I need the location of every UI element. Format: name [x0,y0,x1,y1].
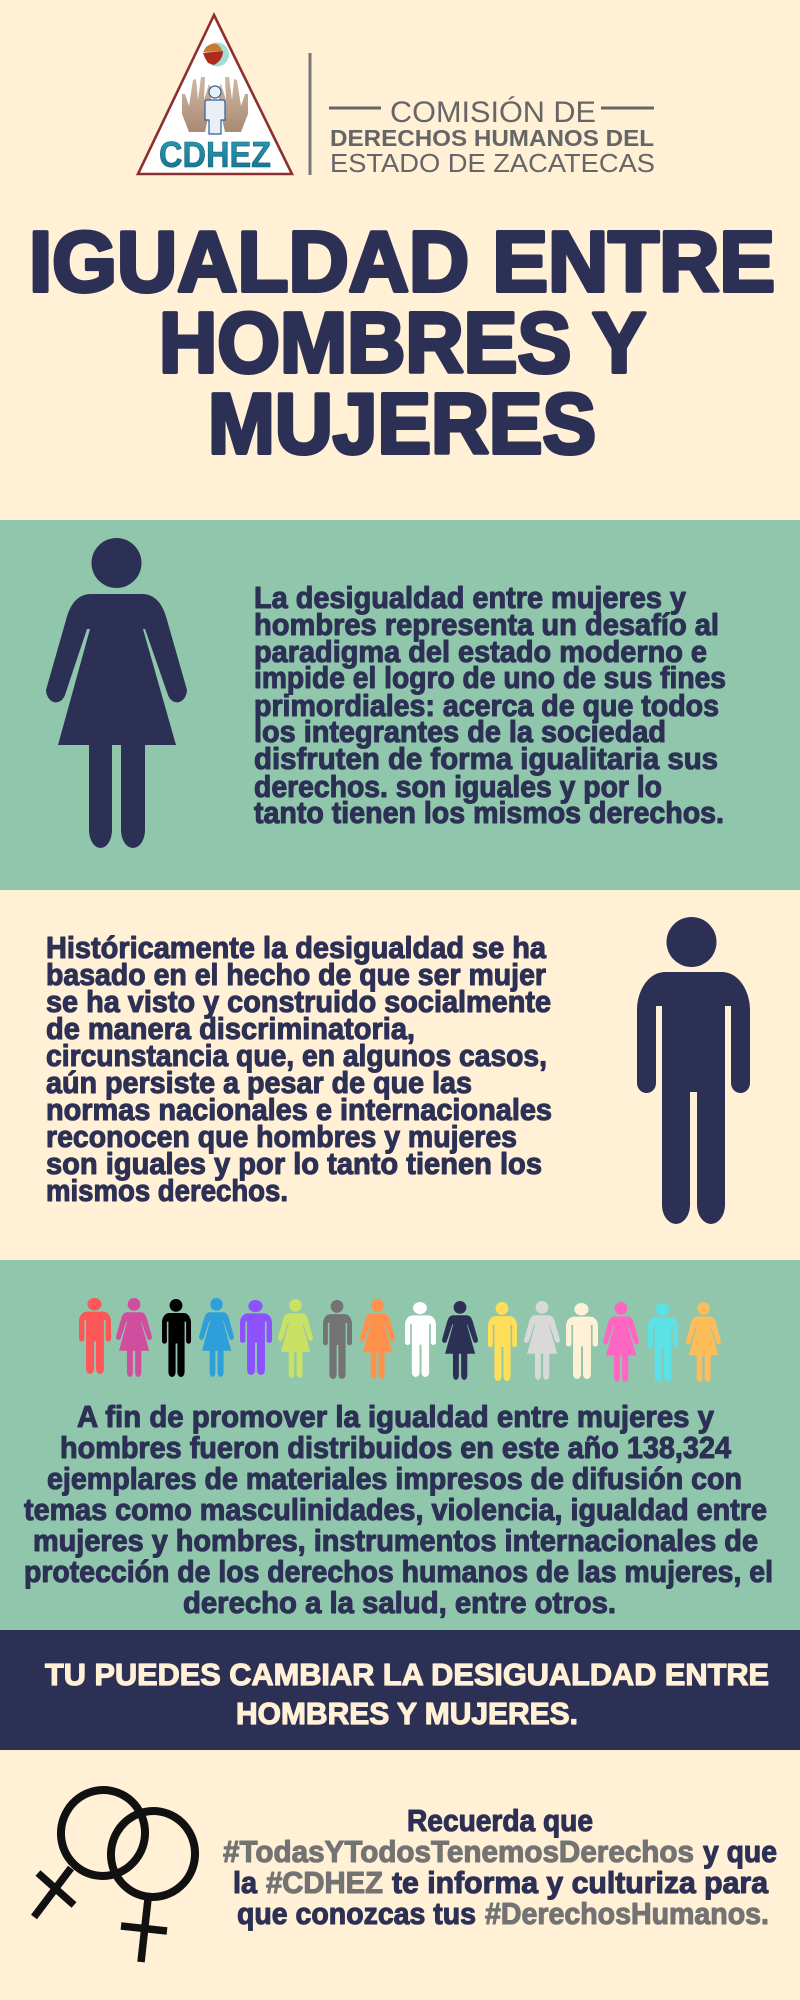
icon: blue woman [199,1298,234,1377]
paragraph one: hombres representa un desafío al [254,607,719,642]
paragraph three: hombres fueron distribuidos en este año 138,324 [60,1430,732,1465]
icon: pink woman [603,1302,639,1382]
icon: gray man [323,1300,352,1379]
people row [79,1298,721,1382]
paragraph two [46,930,552,1208]
commission name: COMISIÓN DE [390,96,596,129]
paragraph three [24,1399,773,1620]
paragraph two: aún persiste a pesar de que las [46,1065,472,1100]
icon: woman [46,538,187,848]
icon: cyan man [648,1303,678,1382]
icon: black man [162,1299,191,1377]
title: HOMBRES Y [159,296,646,391]
paragraph one [254,580,726,830]
paragraph two: son iguales y por lo tanto tienen los [46,1146,542,1181]
divider [308,53,312,175]
banner: call to action [0,1630,800,1750]
paragraph two: mismos derechos. [46,1173,288,1208]
closing message: que conozcas tus [237,1896,476,1931]
icon: cream man [566,1303,598,1379]
panel: man and second paragraph [46,917,750,1224]
paragraph one: disfruten de forma igualitaria sus [254,741,718,776]
title: IGUALDAD ENTRE [29,215,775,310]
paragraph two: reconocen que hombres y mujeres [46,1119,517,1154]
icon: light gray woman [524,1301,560,1380]
paragraph one: primordiales: acerca de que todos [254,688,719,723]
paragraph two: Históricamente la desigualdad se ha [46,930,547,965]
closing message: la [233,1865,258,1900]
icon: orange woman [360,1299,395,1379]
panel: people row and third paragraph [0,1260,800,1630]
icon: man [637,917,750,1224]
closing message: #DerechosHumanos. [485,1896,769,1931]
paragraph one: derechos. son iguales y por lo [254,769,662,804]
icon: yellow man [488,1302,517,1381]
paragraph three: derecho a la salud, entre otros. [183,1585,616,1620]
icon: hands [182,77,248,132]
icon: sun [203,42,229,66]
paragraph two: basado en el hecho de que ser mujer [46,957,546,992]
banner: call to action: HOMBRES Y MUJERES. [236,1696,578,1731]
commission name [329,96,655,178]
logo wordmark: CDHEZ [159,134,271,175]
title [29,215,775,472]
paragraph two: normas nacionales e internacionales [46,1092,552,1127]
icon: red man [79,1298,111,1374]
paragraph three: ejemplares de materiales impresos de difusión con [47,1461,742,1496]
closing message: Recuerda que [407,1803,593,1838]
commission name: ESTADO DE ZACATECAS [330,150,655,178]
closing message: #TodasYTodosTenemosDerechos [223,1834,694,1869]
icon: interlocked female symbols [34,1783,202,1962]
paragraph two: se ha visto y construido socialmente [46,984,551,1019]
icon: purple man [240,1300,272,1375]
closing message: te informa y culturiza para [392,1865,769,1900]
paragraph one: La desigualdad entre mujeres y [254,580,687,615]
paragraph one: tanto tienen los mismos derechos. [254,795,724,830]
icon: lime woman [278,1299,313,1378]
paragraph three: A fin de promover la igualdad entre mujeres y [77,1399,715,1434]
closing message: y que [703,1834,777,1869]
paragraph one: los integrantes de la sociedad [254,714,666,749]
paragraph three: mujeres y hombres, instrumentos internacionales de [33,1523,758,1558]
title: MUJERES [208,377,596,472]
paragraph one: paradigma del estado moderno e [254,634,707,669]
icon: person in logo [205,86,225,134]
header: logo and commission name [138,15,655,178]
icon: navy woman [442,1301,478,1380]
paragraph two: circunstancia que, en algunos casos, [46,1038,547,1073]
panel: woman and first paragraph [0,520,800,890]
banner: call to action: TU PUEDES CAMBIAR LA DESIGUALDAD ENTRE [45,1657,769,1692]
icon: white man [405,1302,436,1377]
paragraph one: impide el logro de uno de sus fines [254,660,726,695]
commission name: DERECHOS HUMANOS DEL [330,125,654,151]
logo: CDHEZ triangle [138,15,292,175]
closing message: #CDHEZ [266,1865,383,1900]
icon: amber woman [686,1302,721,1382]
paragraph two: de manera discriminatoria, [46,1011,415,1046]
closing message [223,1803,777,1931]
icon: magenta woman [116,1298,152,1377]
